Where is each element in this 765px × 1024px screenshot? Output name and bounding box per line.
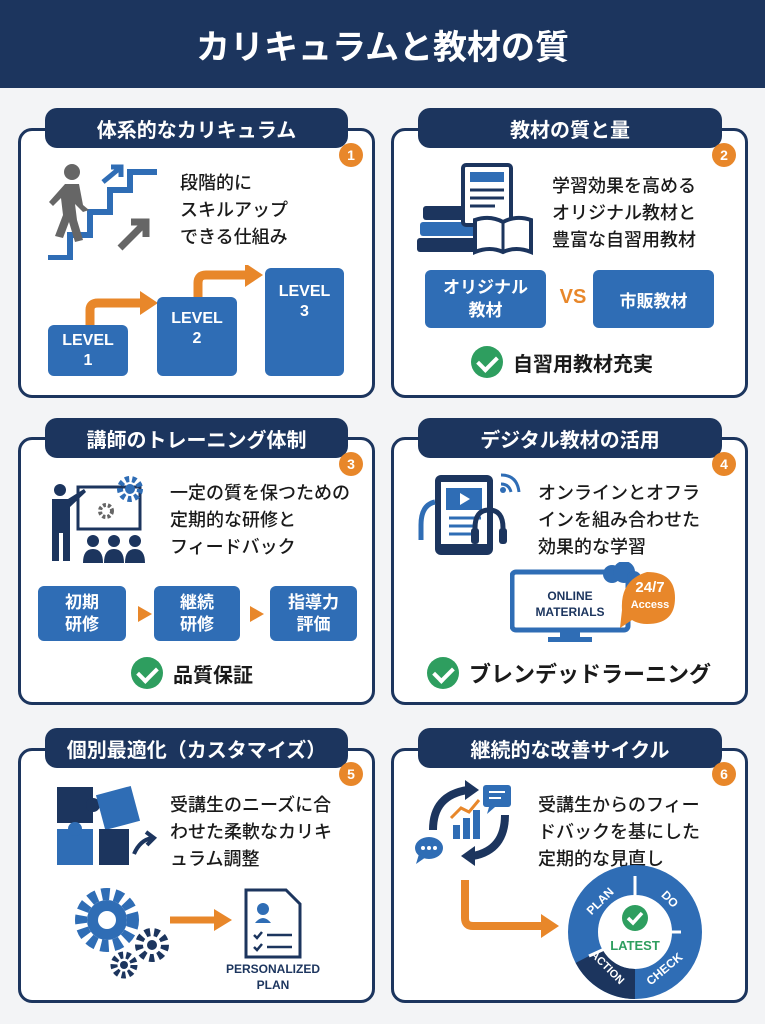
panel 5: personalization: [18, 748, 375, 1003]
comparison boxes: 教材: [468, 301, 502, 320]
icon: feedback cycle: [415, 780, 511, 866]
badge 3: 3: [347, 456, 355, 472]
badge 2: [712, 143, 736, 167]
training flow: 継続: [180, 592, 214, 612]
text 2: [552, 176, 696, 250]
levels chart: LEVEL: [62, 332, 114, 348]
icon: books: [417, 163, 533, 255]
text 2: 学習効果を高める: [552, 176, 696, 196]
badge 5: [339, 762, 363, 786]
text 1: できる仕組み: [180, 227, 288, 247]
levels chart: 1: [84, 352, 92, 368]
training flow: 指導力: [288, 592, 339, 612]
PDCA cycle: PLAN: [584, 885, 617, 918]
training flow: [38, 586, 357, 641]
training flow: 評価: [296, 614, 330, 634]
text 1: 段階的に: [180, 173, 252, 193]
levels chart: [48, 265, 344, 376]
text 3: 一定の質を保つための: [170, 483, 350, 503]
PDCA cycle: CHECK: [644, 950, 686, 988]
PDCA cycle: DO: [659, 888, 681, 910]
icon: puzzle: [57, 786, 157, 865]
monitor online materials: [510, 562, 675, 642]
badge 5: 5: [347, 766, 355, 782]
panel 3: trainer: [18, 437, 375, 705]
tab 1: 体系的なカリキュラム: [97, 120, 296, 142]
training flow: 研修: [180, 614, 214, 634]
text 3: フィードバック: [170, 537, 296, 557]
badge 6: [712, 762, 736, 786]
comparison boxes: VS: [560, 286, 586, 308]
comparison boxes: オリジナル: [443, 278, 528, 297]
badge 4: 4: [720, 456, 728, 472]
levels chart: LEVEL: [279, 283, 330, 300]
tab 6: [418, 728, 722, 768]
comparison boxes: 市販教材: [620, 292, 688, 310]
tab 4: [418, 418, 722, 458]
levels chart: 3: [300, 303, 309, 320]
training flow: 研修: [65, 614, 99, 634]
check 4: [427, 657, 711, 689]
icon: tablet headphones: [418, 474, 520, 555]
icon: trainer: [52, 476, 145, 563]
text 3: 定期的な研修と: [170, 510, 296, 530]
monitor online materials: 24/7: [635, 579, 665, 596]
check 4: ブレンデッドラーニング: [469, 662, 711, 687]
text 2: オリジナル教材と: [552, 203, 696, 223]
tab 1: [45, 108, 348, 148]
orange arrow: [461, 880, 559, 938]
levels chart: LEVEL: [171, 310, 223, 327]
badge 6: 6: [720, 766, 728, 782]
PDCA cycle: ACTION: [588, 949, 626, 987]
text 6: 定期的な見直し: [538, 849, 664, 869]
text 5: わせた柔軟なカリキ: [170, 822, 332, 842]
text 6: ドバックを基にした: [538, 822, 700, 842]
monitor online materials: ONLINE: [547, 589, 593, 603]
tab 4: デジタル教材の活用: [480, 430, 660, 452]
text 1: スキルアップ: [180, 200, 288, 220]
tab 2: [418, 108, 722, 148]
text 5: 受講生のニーズに合: [170, 795, 331, 815]
panel 2: materials: [391, 128, 748, 398]
text 5: ュラム調整: [170, 849, 259, 869]
text 4: [538, 483, 700, 557]
tab 5: [45, 728, 348, 768]
text 2: 豊富な自習用教材: [552, 230, 696, 250]
check 2: [471, 346, 653, 378]
icon: gears and plan: [75, 888, 320, 992]
PDCA cycle: LATEST: [610, 938, 660, 953]
panel 4: digital: [391, 437, 748, 705]
badge 1: 1: [347, 147, 355, 163]
check 2: 自習用教材充実: [513, 354, 653, 376]
icon: stairs person: [48, 164, 157, 260]
text 4: インを組み合わせた: [538, 510, 700, 530]
icon: gears and plan: PLAN: [257, 978, 289, 992]
badge 2: 2: [720, 147, 728, 163]
header: カリキュラムと教材の質: [196, 28, 569, 66]
monitor online materials: Access: [631, 599, 669, 611]
tab 5: 個別最適化（カスタマイズ）: [67, 740, 326, 762]
icon: gears and plan: PERSONALIZED: [226, 962, 320, 976]
badge 4: [712, 452, 736, 476]
tab 3: [45, 418, 348, 458]
check 3: 品質保証: [173, 664, 253, 686]
panel 1: curriculum: [18, 128, 375, 398]
panel 6: improvement cycle: [391, 748, 748, 1003]
tab 6: 継続的な改善サイクル: [470, 740, 670, 762]
text 5: [170, 795, 332, 869]
text 6: [538, 795, 700, 869]
levels chart: 2: [193, 330, 201, 347]
text 3: [170, 483, 350, 557]
tab 2: 教材の質と量: [510, 120, 630, 142]
training flow: 初期: [65, 592, 99, 612]
text 4: 効果的な学習: [538, 537, 646, 557]
PDCA cycle: [568, 865, 702, 999]
badge 3: [339, 452, 363, 476]
check 3: [131, 657, 253, 689]
header: [0, 0, 765, 88]
monitor online materials: MATERIALS: [535, 605, 605, 619]
text 4: オンラインとオフラ: [538, 483, 700, 503]
badge 1: [339, 143, 363, 167]
tab 3: 講師のトレーニング体制: [86, 430, 306, 452]
text 6: 受講生からのフィー: [538, 795, 700, 815]
comparison boxes: [425, 270, 714, 328]
text 1: [180, 173, 288, 247]
